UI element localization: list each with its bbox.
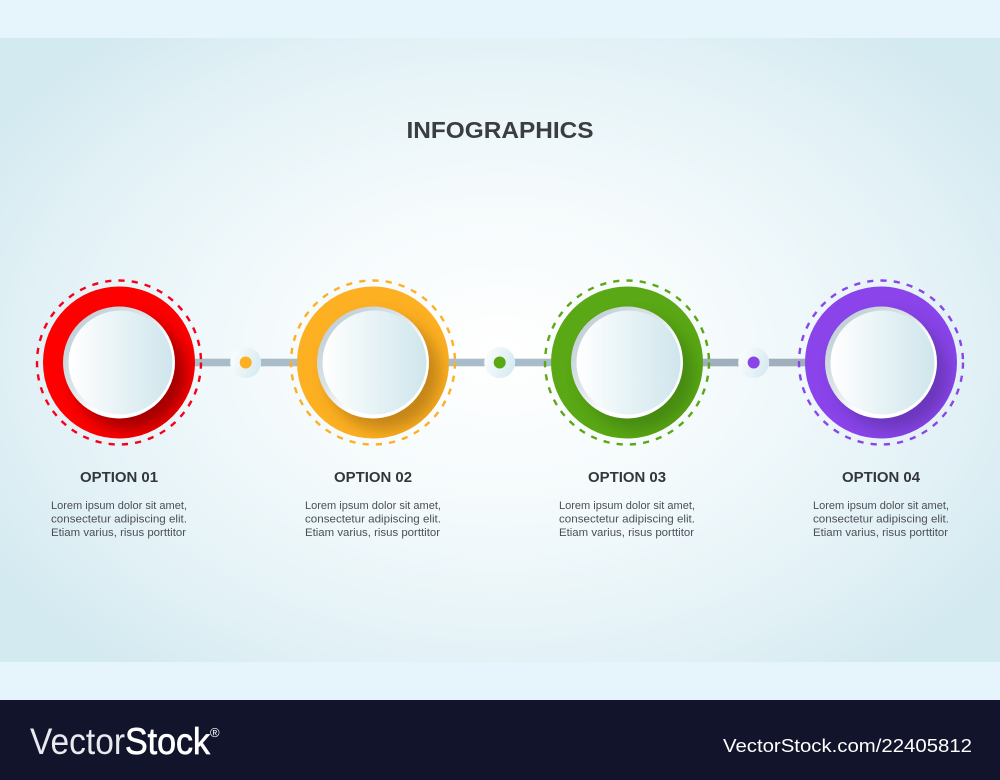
option 4 text: Etiam varius, risus porttitor	[813, 527, 948, 539]
option 2 text	[305, 470, 441, 539]
option 1 text: consectetur adipiscing elit.	[51, 514, 187, 526]
option 2 circle: orange	[291, 280, 455, 444]
option 4 circle: purple	[799, 280, 963, 444]
footer logo: ®	[210, 725, 220, 740]
option 4 text: consectetur adipiscing elit.	[813, 514, 949, 526]
footer logo: Vector	[30, 721, 125, 762]
option 3 text: OPTION 03	[588, 470, 666, 486]
connector 3	[698, 347, 810, 378]
option 3 text: consectetur adipiscing elit.	[559, 514, 695, 526]
option 1 circle: red	[37, 280, 201, 444]
option 2 text: Etiam varius, risus porttitor	[305, 527, 440, 539]
option 1 text: Etiam varius, risus porttitor	[51, 527, 186, 539]
option 2 text: OPTION 02	[334, 470, 412, 486]
bottom strip	[0, 662, 1000, 700]
footer logo: Stock	[125, 721, 210, 762]
footer logo	[30, 721, 220, 762]
option 1 text: OPTION 01	[80, 470, 158, 486]
top strip	[0, 0, 1000, 38]
option 3 text: Etiam varius, risus porttitor	[559, 527, 694, 539]
option 3 text: Lorem ipsum dolor sit amet,	[559, 500, 695, 512]
background panel	[0, 38, 1000, 662]
option 3 circle: green	[545, 280, 709, 444]
footer image id: VectorStock.com/22405812	[723, 735, 972, 756]
option 4 text: Lorem ipsum dolor sit amet,	[813, 500, 949, 512]
footer bar	[0, 700, 1000, 780]
option 3 text	[559, 470, 695, 539]
option 4 text: OPTION 04	[842, 470, 920, 486]
connector 2	[444, 347, 556, 378]
option 2 text: consectetur adipiscing elit.	[305, 514, 441, 526]
title: INFOGRAPHICS	[406, 117, 594, 143]
option 4 text	[813, 470, 949, 539]
option 1 text	[51, 470, 187, 539]
connector 1	[190, 347, 302, 378]
option 2 text: Lorem ipsum dolor sit amet,	[305, 500, 441, 512]
option 1 text: Lorem ipsum dolor sit amet,	[51, 500, 187, 512]
